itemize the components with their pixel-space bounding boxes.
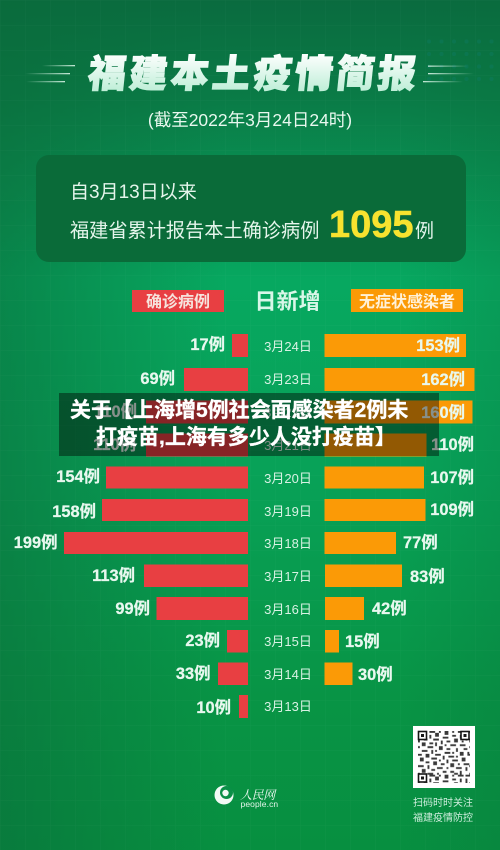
row 3月20日: 3月20日: [264, 471, 312, 486]
row 3月13日: [196, 695, 312, 718]
row 3月15日: 23例: [185, 632, 220, 650]
big number 1095: 1095: [329, 204, 414, 246]
QR caption: [413, 796, 473, 824]
row 3月16日: 3月16日: [264, 602, 312, 617]
legend: confirmed cases: [132, 290, 224, 312]
logo: people.cn: [214, 786, 278, 809]
row 3月18日: 199例: [14, 534, 58, 552]
row 3月17日: [92, 564, 445, 587]
chart: daily bars: [14, 334, 474, 718]
row 3月15日: 15例: [345, 633, 380, 651]
legend: asymptomatic: 无症状感染者: [359, 292, 455, 311]
title block: [25, 53, 474, 96]
title left speed lines: [25, 65, 75, 82]
row 3月22日: [94, 400, 472, 424]
row 3月14日: 30例: [358, 666, 393, 684]
legend: confirmed cases: 确诊病例: [146, 292, 210, 311]
decorative dot pattern: [427, 36, 497, 82]
title right speed lines: [423, 66, 474, 82]
row 3月23日: 3月23日: [264, 372, 312, 387]
logo wordmark: 人民网: [240, 786, 277, 803]
row 3月16日: 42例: [372, 600, 407, 618]
row 3月15日: [185, 630, 380, 652]
row 3月17日: 113例: [92, 567, 135, 585]
banner text: 关于【上海增5例社会面感染者2例未: [70, 398, 408, 422]
row 3月24日: [190, 334, 466, 357]
icon: people.cn emblem: [214, 786, 234, 804]
row 3月21日: 3月21日: [264, 438, 312, 453]
panel text: since March 13: 自3月13日以来: [70, 181, 197, 203]
row 3月17日: 83例: [410, 568, 445, 586]
banner text: [70, 398, 408, 449]
row 3月20日: 107例: [430, 469, 474, 487]
QR code: [413, 726, 475, 788]
row 3月18日: 3月18日: [264, 536, 312, 551]
heading: daily new: 日新增: [254, 289, 321, 314]
row 3月21日: [93, 434, 474, 456]
row 3月13日: 3月13日: [264, 699, 312, 714]
overlay caption banner: [59, 393, 439, 456]
row 3月24日: 153例: [416, 337, 460, 355]
title: 福建本土疫情简报: [86, 53, 422, 96]
panel: cumulative total: [36, 155, 466, 262]
unit: 例: [415, 220, 434, 242]
row 3月14日: 3月14日: [264, 667, 312, 682]
row 3月23日: 69例: [140, 370, 175, 388]
row 3月19日: 3月19日: [264, 504, 312, 519]
row 3月19日: 158例: [52, 503, 96, 521]
row 3月18日: 77例: [403, 534, 438, 552]
row 3月20日: [56, 466, 474, 488]
row 3月18日: [14, 532, 438, 554]
QR caption: 福建疫情防控: [413, 811, 473, 824]
logo url: people.cn: [240, 799, 278, 809]
panel text: cumulative label: 福建省累计报告本土确诊病例: [70, 220, 319, 242]
row 3月16日: [115, 597, 407, 620]
row 3月13日: 10例: [196, 699, 231, 717]
row 3月24日: 3月24日: [264, 339, 312, 354]
row 3月23日: 162例: [421, 371, 465, 389]
row 3月14日: 33例: [176, 665, 210, 683]
row 3月22日: 3月22日: [264, 405, 312, 420]
row 3月24日: 17例: [190, 336, 225, 354]
subtitle: date: (截至2022年3月24日24时): [148, 110, 352, 130]
row 3月15日: 3月15日: [264, 634, 312, 649]
row 3月23日: [140, 368, 474, 391]
row 3月22日: 160例: [421, 404, 465, 422]
row 3月21日: 110例: [431, 436, 474, 454]
row 3月17日: 3月17日: [264, 569, 312, 584]
row 3月20日: 154例: [56, 468, 100, 486]
QR caption: 扫码时时关注: [413, 796, 473, 809]
row 3月19日: 109例: [430, 501, 474, 519]
QR finder marks: [418, 732, 469, 782]
legend: asymptomatic: [351, 289, 463, 312]
banner text: 打疫苗,上海有多少人没打疫苗】: [96, 426, 396, 449]
row 3月14日: [176, 662, 393, 685]
row 3月22日: 110例: [94, 403, 137, 421]
row 3月19日: [52, 499, 474, 521]
row 3月16日: 99例: [115, 600, 150, 618]
row 3月21日: 110例: [93, 436, 136, 454]
